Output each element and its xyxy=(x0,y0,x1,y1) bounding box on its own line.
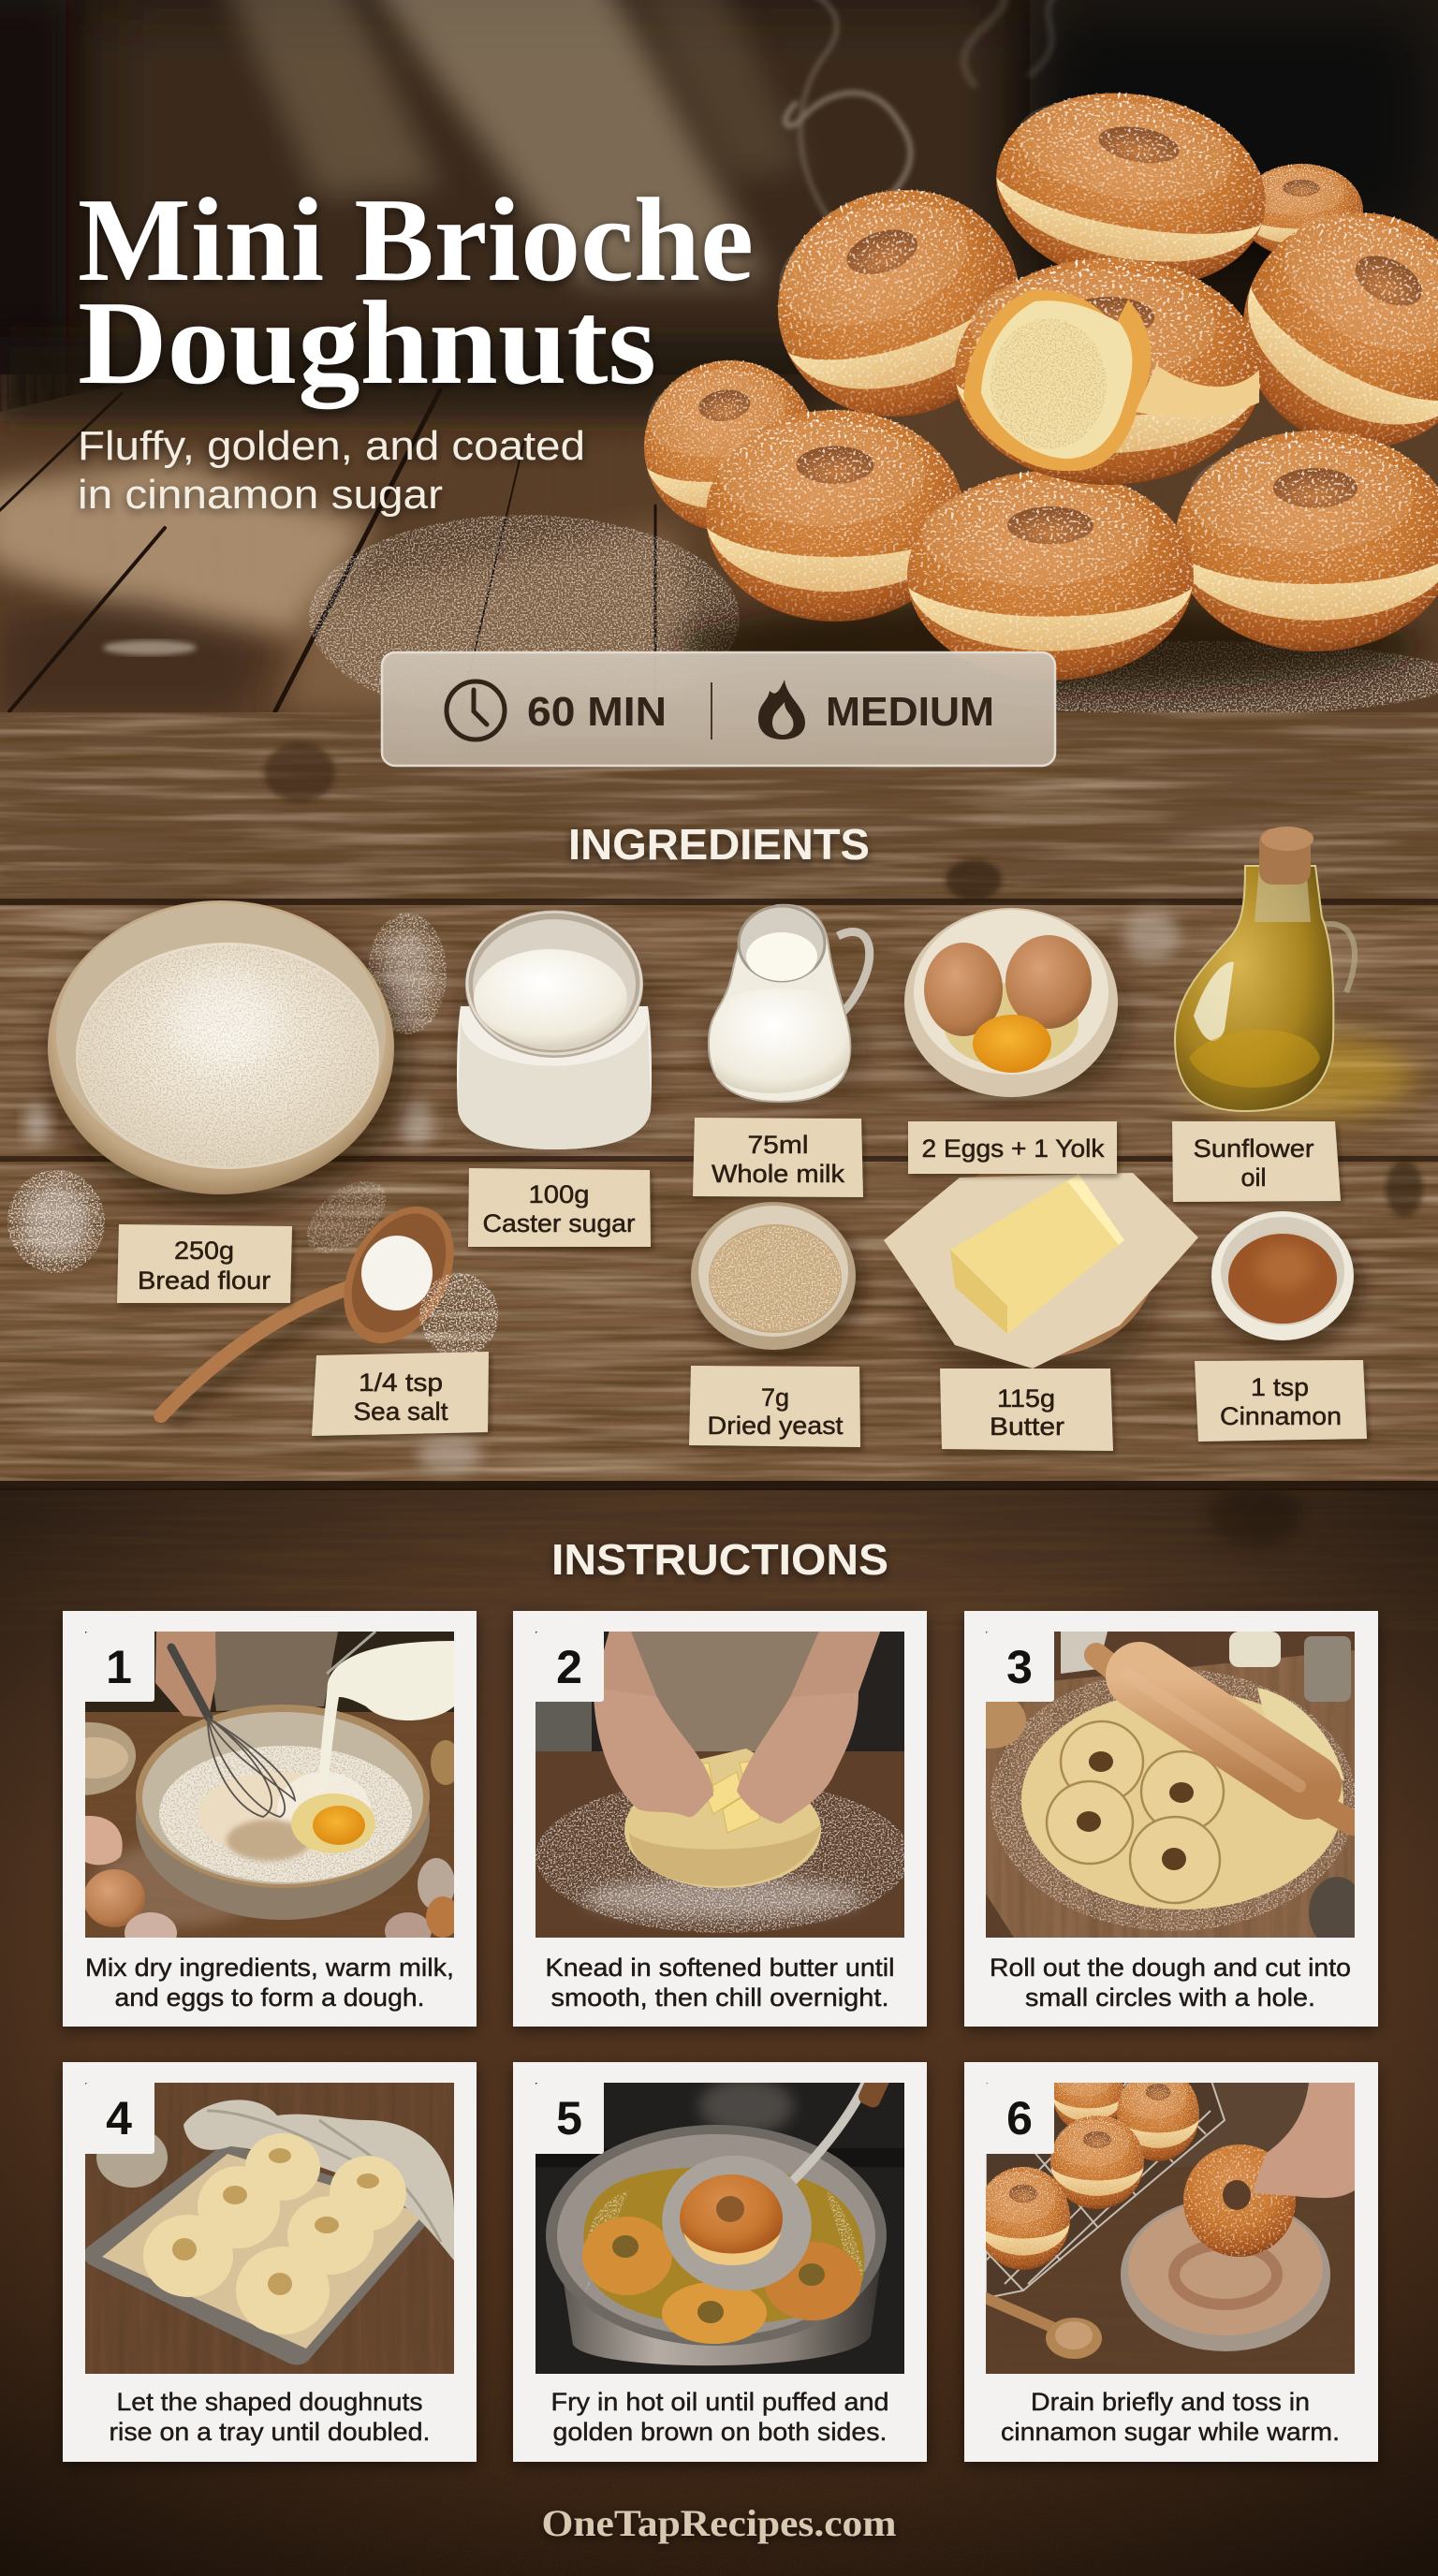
label: bread flour: 250g xyxy=(174,1237,234,1265)
step 5 photo xyxy=(536,2083,904,2374)
label: dried yeast xyxy=(689,1366,860,1447)
step 6 caption: Drain briefly and toss in xyxy=(1031,2388,1310,2416)
step 2 caption: Knead in softened butter until xyxy=(545,1954,895,1982)
hand and whisk xyxy=(155,1632,216,1718)
step card 4 xyxy=(63,2062,477,2462)
label: sea salt xyxy=(312,1352,489,1436)
title: Doughnuts xyxy=(78,276,656,409)
step 3 photo xyxy=(986,1632,1355,1938)
difficulty text: MEDIUM xyxy=(826,689,994,735)
steam xyxy=(785,0,1058,225)
label: dried yeast: Dried yeast xyxy=(708,1412,844,1440)
label: butter: Butter xyxy=(990,1412,1064,1441)
step 5 caption xyxy=(550,2388,889,2446)
label: sea salt: Sea salt xyxy=(354,1398,448,1426)
time text: 60 MIN xyxy=(527,689,667,735)
step 6 number xyxy=(986,2083,1054,2154)
label: bread flour xyxy=(117,1224,292,1303)
step 3 number xyxy=(986,1632,1054,1702)
icon: clock xyxy=(447,681,505,739)
hero panel xyxy=(0,0,1438,721)
label: whole milk: 75ml xyxy=(747,1131,809,1159)
icon: yeast bowl xyxy=(691,1202,865,1359)
subtitle xyxy=(78,423,585,518)
label: bread flour: Bread flour xyxy=(138,1266,271,1295)
spilled flour xyxy=(7,910,1180,1472)
step 6 caption: cinnamon sugar while warm. xyxy=(1001,2418,1340,2446)
step 3 number: 3 xyxy=(1006,1641,1033,1693)
sugar bowl xyxy=(1121,2198,1330,2351)
label: butter: 115g xyxy=(997,1384,1055,1412)
step 5 caption: golden brown on both sides. xyxy=(552,2418,888,2446)
light rays backdrop xyxy=(0,0,1422,355)
step card 6 xyxy=(964,2054,1378,2462)
instructions panel xyxy=(0,1486,1438,2576)
icon: oil bottle xyxy=(1175,827,1414,1120)
wooden spoon xyxy=(981,2296,1102,2359)
label: sunflower oil: Sunflower xyxy=(1193,1134,1314,1163)
step 1 caption xyxy=(85,1954,454,2012)
step 2 number: 2 xyxy=(556,1641,582,1693)
bowl xyxy=(136,1718,430,1920)
icon: eggs bowl xyxy=(904,908,1129,1105)
step card 3 xyxy=(955,1611,1378,2027)
subtitle: in cinnamon sugar xyxy=(78,472,443,518)
donut cut rings xyxy=(1047,1721,1224,1903)
title: Mini Brioche xyxy=(78,173,754,306)
label: eggs: 2 Eggs + 1 Yolk xyxy=(921,1134,1105,1163)
step 4 photo xyxy=(85,2083,454,2374)
step 2 caption xyxy=(545,1954,895,2012)
frying doughnuts xyxy=(582,2217,861,2344)
step 3 caption xyxy=(990,1954,1351,2012)
heading: ingredients: INGREDIENTS xyxy=(568,820,870,869)
hand xyxy=(1253,2083,1355,2198)
label: whole milk: Whole milk xyxy=(712,1160,845,1188)
small yeast bowl xyxy=(81,1722,136,1795)
pot xyxy=(559,2242,884,2365)
step 2 photo xyxy=(536,1632,904,1938)
icon: butter on paper xyxy=(884,1161,1198,1395)
label: caster sugar xyxy=(468,1168,651,1247)
step 4 number: 4 xyxy=(106,2092,132,2144)
eggs and shells xyxy=(83,1869,145,1927)
bitten doughnut xyxy=(955,257,1262,485)
label: cinnamon: 1 tsp xyxy=(1251,1373,1309,1401)
step 4 caption: rise on a tray until doubled. xyxy=(109,2418,431,2446)
step 6 photo xyxy=(986,2083,1355,2374)
step 1 caption: Mix dry ingredients, warm milk, xyxy=(85,1954,454,1982)
wooden table xyxy=(0,337,1438,721)
cooling rack xyxy=(986,2078,1225,2298)
icon: cinnamon bowl xyxy=(1211,1211,1363,1351)
step 5 caption: Fry in hot oil until puffed and xyxy=(550,2388,889,2416)
risen doughnuts xyxy=(143,2133,406,2334)
step 1 number: 1 xyxy=(106,1641,132,1693)
step 5 number: 5 xyxy=(556,2092,582,2144)
icon: sugar jar xyxy=(457,912,652,1149)
label: caster sugar: Caster sugar xyxy=(483,1209,635,1237)
step card 5 xyxy=(513,2062,927,2462)
step 1 number xyxy=(85,1632,154,1702)
step 1 photo xyxy=(85,1632,454,1938)
step 2 number xyxy=(536,1632,604,1702)
held doughnut xyxy=(1183,2144,1296,2257)
label: eggs xyxy=(908,1121,1117,1174)
brown background xyxy=(0,1486,1438,2576)
footer brand: OneTapRecipes.com xyxy=(541,2502,897,2544)
icon: milk jug xyxy=(707,905,870,1106)
label: caster sugar: 100g xyxy=(528,1180,590,1208)
label: dried yeast: 7g xyxy=(761,1383,789,1412)
step 5 number xyxy=(536,2083,604,2154)
step 4 number xyxy=(85,2083,154,2154)
step 3 caption: small circles with a hole. xyxy=(1025,1983,1315,2012)
label: sea salt: 1/4 tsp xyxy=(359,1368,443,1397)
milk xyxy=(319,1641,454,1789)
step 4 caption: Let the shaped doughnuts xyxy=(116,2388,423,2416)
ingredients panel xyxy=(0,712,1438,1492)
wood planks xyxy=(0,712,1438,1492)
step 3 caption: Roll out the dough and cut into xyxy=(990,1954,1351,1982)
step 4 caption xyxy=(109,2388,431,2446)
dough sheet xyxy=(1021,1690,1343,1910)
rolling pin xyxy=(1093,1655,1353,1823)
step card 1 xyxy=(61,1611,477,2027)
step 2 caption: smooth, then chill overnight. xyxy=(550,1983,889,2012)
step 1 caption: and eggs to form a dough. xyxy=(114,1983,425,2012)
label: butter xyxy=(940,1368,1113,1451)
hands xyxy=(594,1675,713,1817)
title xyxy=(78,173,754,409)
heading: instructions: INSTRUCTIONS xyxy=(551,1535,888,1584)
label: cinnamon: Cinnamon xyxy=(1220,1402,1342,1430)
slotted spoon xyxy=(652,2067,892,2303)
icon: flour bowl xyxy=(48,900,410,1212)
doughnut pile xyxy=(633,71,1438,693)
label: sunflower oil: oil xyxy=(1240,1164,1267,1192)
step card 2 xyxy=(513,1611,927,2027)
cloth xyxy=(183,2100,454,2261)
label: sunflower oil xyxy=(1172,1121,1341,1202)
label: whole milk xyxy=(693,1118,863,1197)
icon: flame xyxy=(758,680,805,739)
sugared doughnuts xyxy=(976,2054,1199,2270)
step 6 number: 6 xyxy=(1006,2092,1033,2144)
badge: time and difficulty xyxy=(382,652,1055,766)
icon: spoon with salt xyxy=(161,1188,498,1423)
subtitle: Fluffy, golden, and coated xyxy=(78,423,585,469)
label: cinnamon xyxy=(1195,1360,1367,1442)
tray xyxy=(83,2143,439,2364)
step 6 caption xyxy=(1001,2388,1340,2446)
